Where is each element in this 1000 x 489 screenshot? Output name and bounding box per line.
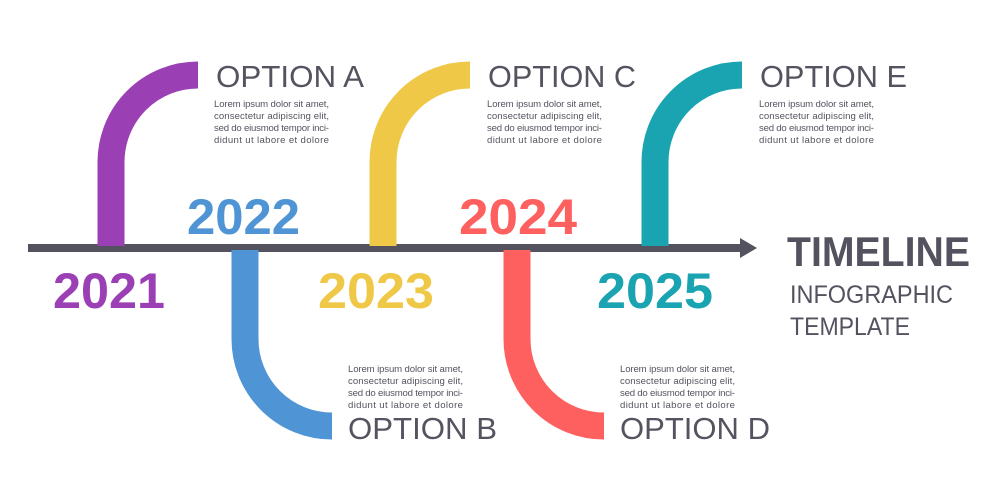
text block: option C: OPTION C [488,59,636,94]
title [787,228,970,341]
years: 2021 [53,263,165,319]
text block: option A: consectetur adipiscing elit, [214,111,329,122]
text block: option C: didunt ut labore et dolore [487,135,602,146]
arc: option E teal [655,75,742,246]
text block: option D: didunt ut labore et dolore [620,400,735,411]
text block: option B: didunt ut labore et dolore [348,400,463,411]
text block: option E: Lorem ipsum dolor sit amet, [759,99,874,110]
years: 2023 [318,263,434,319]
text block: option E: sed do eiusmod tempor inci- [759,123,874,134]
text block: option A: Lorem ipsum dolor sit amet, [214,99,329,110]
years: 2025 [597,263,713,319]
arc: option A purple [111,75,198,246]
text block: option B: OPTION B [348,411,497,446]
text block: option C: consectetur adipiscing elit, [487,111,602,122]
text block: option A: sed do eiusmod tempor inci- [214,123,329,134]
text block: option C: sed do eiusmod tempor inci- [487,123,602,134]
text block: option E: didunt ut labore et dolore [759,135,874,146]
text block: option C: Lorem ipsum dolor sit amet, [487,99,602,110]
text block: option A: didunt ut labore et dolore [214,135,329,146]
arc: option C yellow [383,75,470,246]
text block: option D: Lorem ipsum dolor sit amet, [620,364,735,375]
text block: option B: consectetur adipiscing elit, [348,376,463,387]
timeline arrow [28,238,757,258]
text block: option A [214,59,364,146]
text block: option B: Lorem ipsum dolor sit amet, [348,364,463,375]
text block: option D: OPTION D [620,411,770,446]
arc: option B blue [245,250,332,426]
years [53,189,713,319]
text block: option E: consectetur adipiscing elit, [759,111,874,122]
text block: option E [759,59,907,146]
arc: option D red [517,250,604,426]
title: TEMPLATE [790,313,910,341]
text block: option D [620,364,770,446]
text block: option D: consectetur adipiscing elit, [620,376,735,387]
years: 2022 [187,189,300,245]
text block: option B [348,364,497,446]
text block: option B: sed do eiusmod tempor inci- [348,388,463,399]
text block: option E: OPTION E [760,59,907,94]
text block: option A: OPTION A [216,59,364,94]
title: INFOGRAPHIC [790,281,953,309]
text block: option D: sed do eiusmod tempor inci- [620,388,735,399]
title: TIMELINE [787,228,970,275]
years: 2024 [459,189,577,245]
text block: option C [487,59,636,146]
